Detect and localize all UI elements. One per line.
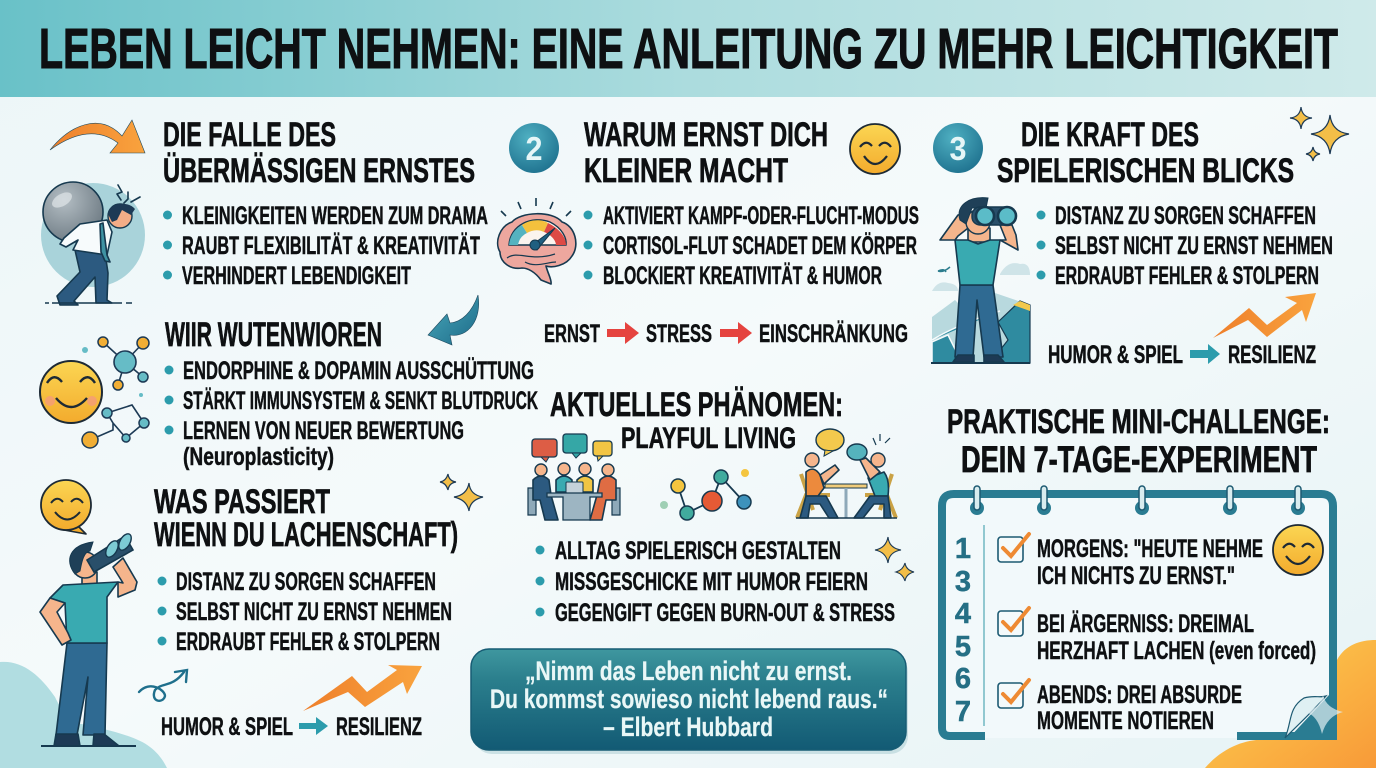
bullet list (158, 568, 452, 656)
formula: humor to resilience: HUMOR & SPIEL (161, 713, 293, 741)
icon: molecule (660, 469, 751, 520)
task 1: MORGENS: "HEUTE NEHME (1037, 535, 1263, 563)
icon: man with binoculars on mountain (931, 198, 1030, 363)
bullet list: (Neuroplasticity) (183, 443, 334, 471)
formula: Ernst to Stress to Einschränkung: ERNST (544, 320, 600, 348)
bullet list (536, 537, 895, 627)
quote callout: „Nimm das Leben nicht zu ernst. (525, 656, 852, 686)
task 3: ABENDS: DREI ABSURDE (1037, 681, 1242, 709)
task 1: ICH NICHTS ZU ERNST." (1037, 562, 1235, 590)
heading: PLAYFUL LIVING (621, 422, 796, 455)
bullet list: MISSGESCHICKE MIT HUMOR FEIERN (555, 568, 868, 596)
quote callout: Du kommst sowieso nicht lebend raus.“ (490, 684, 888, 714)
icon: man with binoculars (40, 532, 137, 746)
formula: humor to resilience: RESILIENZ (1228, 341, 1316, 369)
bullet list: AKTIVIERT KAMPF-ODER-FLUCHT-MODUS (603, 202, 919, 230)
icon: smiley (1273, 525, 1323, 575)
icon: team meeting (528, 434, 620, 520)
icon: zigzag orange arrow (303, 665, 422, 711)
bottom-left decorative blob (0, 662, 167, 768)
icon: smiley (850, 124, 900, 174)
day numbers: 5 (955, 631, 971, 663)
heading: KLEINER MACHT (584, 152, 788, 190)
icon: zigzag orange arrow (1213, 293, 1316, 338)
checkbox 3 (998, 680, 1029, 708)
bullet list: ALLTAG SPIELERISCH GESTALTEN (555, 537, 841, 565)
bullet list: VERHINDERT LEBENDIGKEIT (182, 262, 411, 290)
heading (997, 116, 1294, 190)
title banner (0, 0, 1376, 97)
formula: humor to resilience: HUMOR & SPIEL (1048, 341, 1183, 369)
panel: warum Ernst dich kleiner macht (498, 116, 919, 348)
icon: sparkles (440, 474, 483, 511)
task 2 (1037, 610, 1316, 665)
heading (584, 116, 828, 190)
heading (154, 483, 458, 554)
bullet list (1036, 202, 1333, 290)
bullet list: DISTANZ ZU SORGEN SCHAFFEN (176, 568, 436, 596)
formula: Ernst to Stress to Einschränkung (544, 320, 908, 348)
day numbers: 4 (955, 598, 971, 630)
formula: Ernst to Stress to Einschränkung: EINSCHRÄNKUNG (759, 320, 908, 348)
number badge 3 (933, 123, 983, 173)
heading: DIE KRAFT DES (1021, 116, 1199, 154)
task 3 (1037, 681, 1242, 735)
day numbers: 3 (955, 566, 971, 598)
heading (163, 116, 475, 190)
icon: sparkles (875, 537, 914, 581)
day numbers: 1 (955, 533, 971, 565)
number badge 3: 3 (950, 130, 966, 167)
icon: man carrying boulder (41, 182, 145, 305)
panel: aktuelles Phänomen playful living (471, 386, 914, 754)
icon: squiggle arrow (139, 670, 187, 701)
bullet list: ENDORPHINE & DOPAMIN AUSSCHÜTTUNG (183, 356, 534, 385)
panel: wir wutenwioren (40, 316, 538, 471)
formula: humor to resilience: RESILIENZ (336, 713, 422, 741)
number badge 2 (509, 123, 559, 173)
bullet list: LERNEN VON NEUER BEWERTUNG (183, 417, 464, 445)
icon: brain with gauge (498, 198, 576, 284)
task 2: BEI ÄRGERNISS: DREIMAL (1037, 610, 1254, 638)
heading: ÜBERMÄSSIGEN ERNSTES (163, 152, 475, 190)
icon: smiley with molecules (40, 337, 149, 448)
quote callout: – Elbert Hubbard (603, 712, 773, 742)
day numbers: 7 (955, 696, 971, 728)
bullet list: BLOCKIERT KREATIVITÄT & HUMOR (603, 262, 882, 290)
panel: die Kraft des spielerischen Blicks (931, 107, 1349, 369)
bullet list: ERDRAUBT FEHLER & STOLPERN (176, 628, 440, 656)
panel: praktische Mini-Challenge (942, 403, 1343, 740)
heading: WIENN DU LACHENSCHAFT) (154, 516, 458, 554)
bullet list: KLEINIGKEITEN WERDEN ZUM DRAMA (182, 202, 488, 230)
heading: WIIR WUTENWIOREN (165, 316, 382, 354)
panel: die Falle des übermäßigen Ernstes (41, 116, 488, 305)
bullet list (163, 202, 488, 290)
heading: DIE FALLE DES (163, 116, 336, 154)
binder rings (970, 486, 1305, 515)
icon: curved teal arrow (428, 295, 479, 345)
checkbox 2 (998, 608, 1029, 636)
bullet list: STÄRKT IMMUNSYSTEM & SENKT BLUTDRUCK (183, 387, 538, 415)
bullet list (584, 202, 919, 290)
page curl (1285, 695, 1343, 740)
icon: sparkles (1290, 107, 1349, 161)
task 1 (1037, 535, 1263, 590)
heading (947, 403, 1330, 480)
heading: WARUM ERNST DICH (584, 116, 828, 154)
number badge 2: 2 (526, 130, 542, 167)
day numbers (955, 533, 971, 728)
task 3: MOMENTE NOTIEREN (1037, 707, 1214, 735)
calendar notepad (942, 486, 1343, 740)
icon: two people talking at table (796, 429, 897, 518)
panel: was passiert wenn du lachenschaft (40, 474, 483, 746)
bullet list: GEGENGIFT GEGEN BURN-OUT & STRESS (555, 599, 895, 627)
bullet list: SELBST NICHT ZU ERNST NEHMEN (176, 598, 452, 626)
checkbox 1 (998, 534, 1029, 562)
quote callout (471, 649, 908, 754)
day numbers: 6 (955, 663, 971, 695)
icon: curved orange arrow (50, 120, 145, 153)
icon: smiley speech bubble (41, 480, 91, 534)
heading: AKTUELLES PHÄNOMEN: (550, 386, 843, 424)
heading (550, 386, 843, 455)
bullet list: CORTISOL-FLUT SCHADET DEM KÖRPER (603, 231, 917, 260)
bullet list (164, 356, 538, 471)
bullet list: RAUBT FLEXIBILITÄT & KREATIVITÄT (182, 232, 480, 260)
heading: WAS PASSIERT (154, 483, 330, 521)
formula: Ernst to Stress to Einschränkung: STRESS (646, 320, 712, 348)
bottom-right decorative blob (1205, 640, 1376, 768)
